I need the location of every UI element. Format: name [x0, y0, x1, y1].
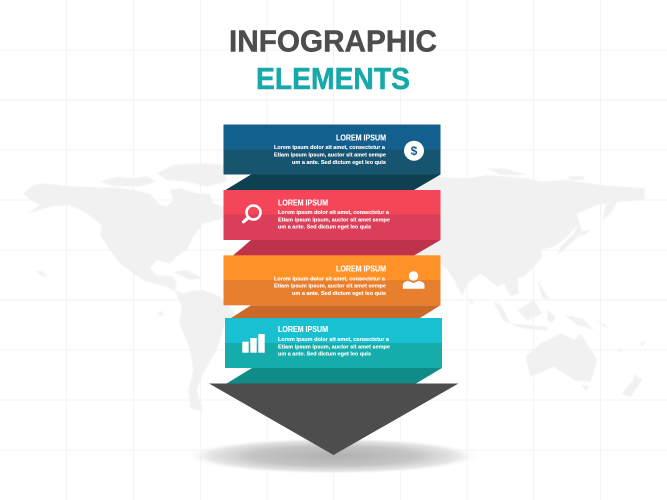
orange text: Etiam ipsum ipsum, auctor sit amet sempe: [274, 284, 386, 290]
orange text: [274, 264, 386, 297]
panel: blue step: [224, 124, 440, 190]
orange text: um a ante. Sed dictum eget leo quis: [292, 291, 386, 297]
ground shadow: [187, 438, 479, 474]
map: Asia and Oceania: [329, 168, 646, 397]
orange banner: [224, 255, 440, 305]
panel: teal step: [225, 318, 442, 384]
arrow: dark downward triangle: [209, 384, 458, 455]
teal text: LOREM IPSUM: [278, 324, 328, 334]
teal text: Lorem ipsum dolor sit amet, consectetur a: [278, 337, 390, 343]
heading: INFOGRAPHIC: INFOGRAPHIC: [229, 24, 437, 58]
red text: [278, 197, 390, 231]
icon: dollar coin: $: [411, 144, 418, 158]
red text: LOREM IPSUM: [278, 197, 328, 207]
blue text: [274, 133, 386, 166]
panel: orange step: [224, 255, 440, 318]
red text: Etiam ipsum ipsum, auctor sit amet sempe: [278, 217, 390, 223]
blue text: Lorem ipsum dolor sit amet, consectetur a: [274, 145, 386, 151]
icon: person: [403, 271, 424, 289]
map: Americas: [23, 163, 235, 412]
teal text: [278, 324, 390, 358]
teal fold strip: [226, 368, 442, 384]
red banner: [224, 190, 440, 240]
orange fold strip: [231, 305, 440, 318]
world map background: [23, 163, 646, 412]
icon: magnifying glass: [244, 206, 260, 222]
icon: bar chart: [242, 334, 265, 353]
blue text: Etiam ipsum ipsum, auctor sit amet sempe: [274, 152, 386, 158]
teal text: um a ante. Sed dictum eget leo quis: [278, 352, 371, 358]
teal text: Etiam ipsum ipsum, auctor sit amet sempe: [278, 344, 390, 350]
red text: Lorem ipsum dolor sit amet, consectetur a: [278, 210, 390, 216]
blue fold strip: [226, 174, 440, 190]
orange text: Lorem ipsum dolor sit amet, consectetur a: [274, 276, 386, 282]
blue banner: [224, 124, 440, 174]
title: [229, 24, 437, 96]
orange text: LOREM IPSUM: [336, 264, 386, 274]
blue text: LOREM IPSUM: [336, 133, 386, 143]
heading: ELEMENTS: ELEMENTS: [256, 61, 410, 96]
icon: dollar coin: [404, 141, 424, 161]
blue text: um a ante. Sed dictum eget leo quis: [292, 160, 386, 166]
red text: um a ante. Sed dictum eget leo quis: [278, 225, 371, 231]
panel: red step: [224, 190, 440, 256]
teal banner: [225, 318, 442, 368]
red fold strip: [233, 240, 440, 256]
